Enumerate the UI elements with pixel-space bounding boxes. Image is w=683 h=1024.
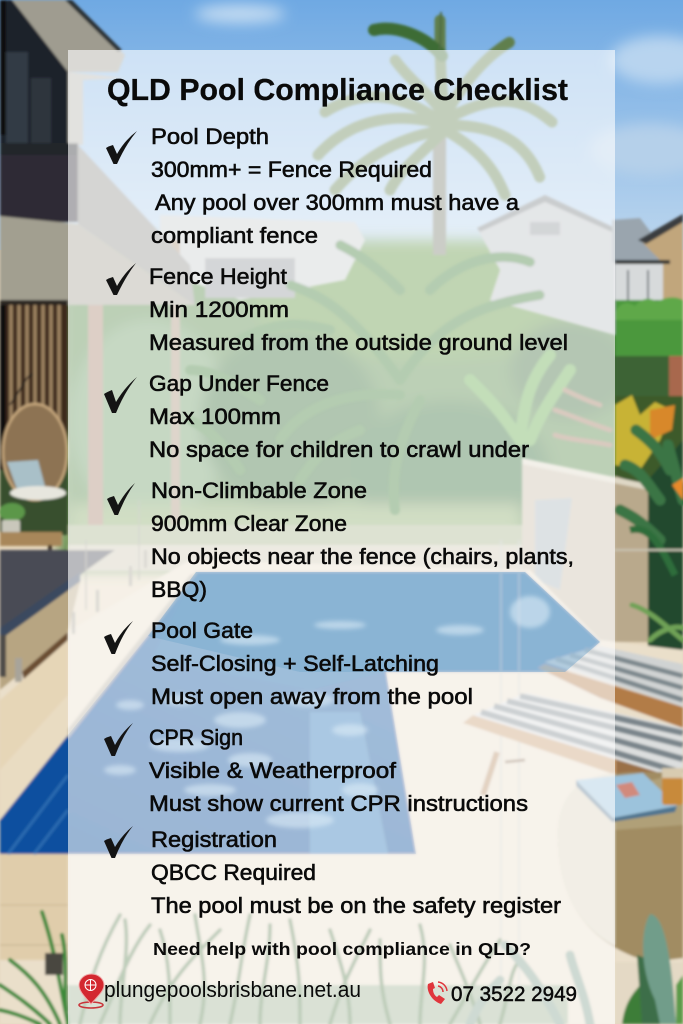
left building upper (0, 0, 68, 145)
text: non-climbable zone: 900mm Clear Zone (151, 511, 347, 536)
icon: check mark (104, 621, 133, 654)
text: pool depth: compliant fence (151, 223, 318, 248)
item: non-climbable zone (107, 478, 574, 602)
item: gap under fence (104, 371, 530, 462)
item: pool gate (104, 618, 473, 709)
stone texture (0, 854, 68, 960)
side table (0, 532, 62, 546)
foreground plants (68, 985, 568, 1024)
text: registration: Registration (151, 827, 277, 852)
text: cpr sign: CPR Sign (149, 725, 243, 750)
text: pool gate (151, 618, 473, 709)
stone water wall (522, 458, 648, 642)
text: fence height: Min 1200mm (149, 297, 289, 322)
left deck band (0, 572, 198, 825)
sky (0, 0, 683, 250)
plants beside wall (648, 440, 683, 650)
columns and glass rail (171, 240, 180, 540)
pool tint seen through panel (68, 572, 600, 854)
icon: check mark (106, 263, 136, 295)
text: non-climbable zone: BBQ) (151, 577, 207, 602)
text: fence height (149, 264, 568, 355)
icon: check mark (104, 377, 137, 413)
text: gap under fence: No space for children to crawl under (149, 437, 530, 462)
text: pool depth (151, 124, 519, 248)
icon: phone (428, 982, 447, 1004)
text: gap under fence: Gap Under Fence (149, 371, 329, 396)
title: QLD Pool Compliance Checklist (107, 72, 568, 107)
icon: check mark (106, 131, 137, 164)
icon: check mark (104, 723, 133, 756)
item: cpr sign (104, 723, 528, 816)
woven ottoman (558, 772, 683, 962)
text: pool gate: Pool Gate (151, 618, 253, 643)
website: plungepoolsbrisbane.net.au (104, 977, 361, 1002)
soffit (0, 216, 195, 305)
text: pool depth: 300mm+ = Fence Required (151, 157, 432, 182)
text: cpr sign (149, 725, 528, 816)
white beam (78, 145, 195, 305)
text: pool gate: Must open away from the pool (151, 684, 473, 709)
text: non-climbable zone: No objects near the fence (chairs, plants, (151, 544, 574, 569)
item: pool depth (106, 124, 519, 248)
text: pool depth: Pool Depth (151, 124, 269, 149)
palm tree (433, 110, 446, 255)
text: fence height: Fence Height (149, 264, 288, 289)
text: pool depth: Any pool over 300mm must have a (155, 190, 519, 215)
icon: map pin with globe (79, 974, 104, 1008)
text: gap under fence (149, 371, 530, 462)
timber slats (0, 305, 68, 535)
deck and pool (0, 560, 683, 1024)
deck lower left (0, 640, 68, 770)
panel: translucent white overlay (68, 50, 615, 1024)
text: gap under fence: Max 100mm (149, 404, 281, 429)
text: cpr sign: Visible & Weatherproof (149, 758, 397, 783)
deck right lower (615, 962, 683, 1024)
ferns and broad leaves (190, 245, 540, 510)
book on ottoman (576, 773, 677, 818)
text: fence height: Measured from the outside ground level (149, 330, 568, 355)
right hedge and bromeliads (615, 300, 683, 356)
text: cpr sign: Must show current CPR instructions (149, 791, 528, 816)
pool blue at left (0, 735, 68, 854)
potted plant (0, 503, 25, 521)
text: registration (151, 827, 562, 918)
text: non-climbable zone (151, 478, 574, 602)
item: registration (104, 826, 562, 918)
icon: check mark (107, 483, 135, 515)
text: registration: The pool must be on the safety register (151, 893, 562, 918)
glass of drink (662, 768, 683, 805)
deck strip (0, 582, 80, 690)
phone number: 07 3522 2949 (451, 983, 577, 1006)
text: registration: QBCC Required (151, 860, 316, 885)
houses behind garden (477, 195, 615, 335)
hanging egg chair (10, 374, 33, 405)
text: pool gate: Self-Closing + Self-Latching (151, 651, 439, 676)
water ripples (104, 596, 550, 828)
garden (60, 240, 630, 570)
text: non-climbable zone: Non-Climbable Zone (151, 478, 367, 503)
icon: check mark (104, 826, 133, 858)
dark floor (0, 550, 115, 632)
glass fence (86, 500, 139, 610)
item: fence height (106, 263, 568, 355)
call to action: Need help with pool compliance in QLD? (153, 939, 531, 959)
dark beam (0, 144, 78, 223)
sun loungers (538, 664, 683, 728)
